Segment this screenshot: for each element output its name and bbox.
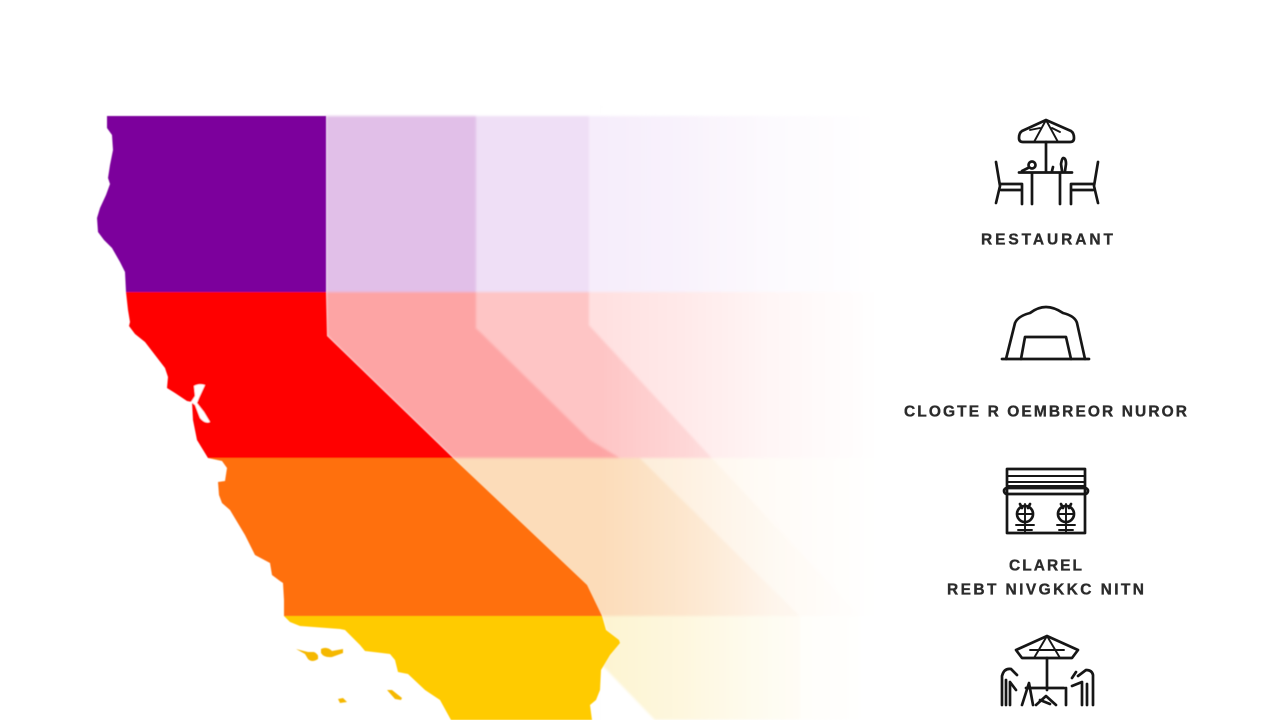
white fade overlay xyxy=(600,105,900,720)
map of California xyxy=(97,116,620,720)
bay inlet xyxy=(191,384,210,422)
region: central, red xyxy=(126,292,453,458)
label: CLOGTE R OEMBREOR NUROR xyxy=(904,404,1187,420)
icon: tent xyxy=(1002,307,1089,359)
icon: patio table with umbrella and chairs xyxy=(996,120,1098,204)
echo band 3 xyxy=(589,116,875,616)
echo band 1 xyxy=(326,116,800,720)
label line 1: CLAREL xyxy=(1009,558,1082,574)
region: south, yellow xyxy=(284,616,620,720)
label: RESTAURANT xyxy=(981,232,1114,248)
region: north, purple xyxy=(97,116,326,292)
item: patio with people xyxy=(1002,636,1093,705)
region: south central, orange xyxy=(208,458,602,616)
label line 2: REBT NIVGKKC NITN xyxy=(947,582,1144,598)
item: tent xyxy=(904,307,1187,420)
icon: shopfront with awning xyxy=(1004,469,1088,533)
icon: umbrella with people xyxy=(1002,636,1093,705)
item: restaurant xyxy=(981,120,1114,248)
item: shopfront xyxy=(947,469,1144,598)
fading echo bands behind the map xyxy=(326,105,900,720)
channel islands xyxy=(296,648,402,703)
echo band 2 xyxy=(476,116,860,720)
